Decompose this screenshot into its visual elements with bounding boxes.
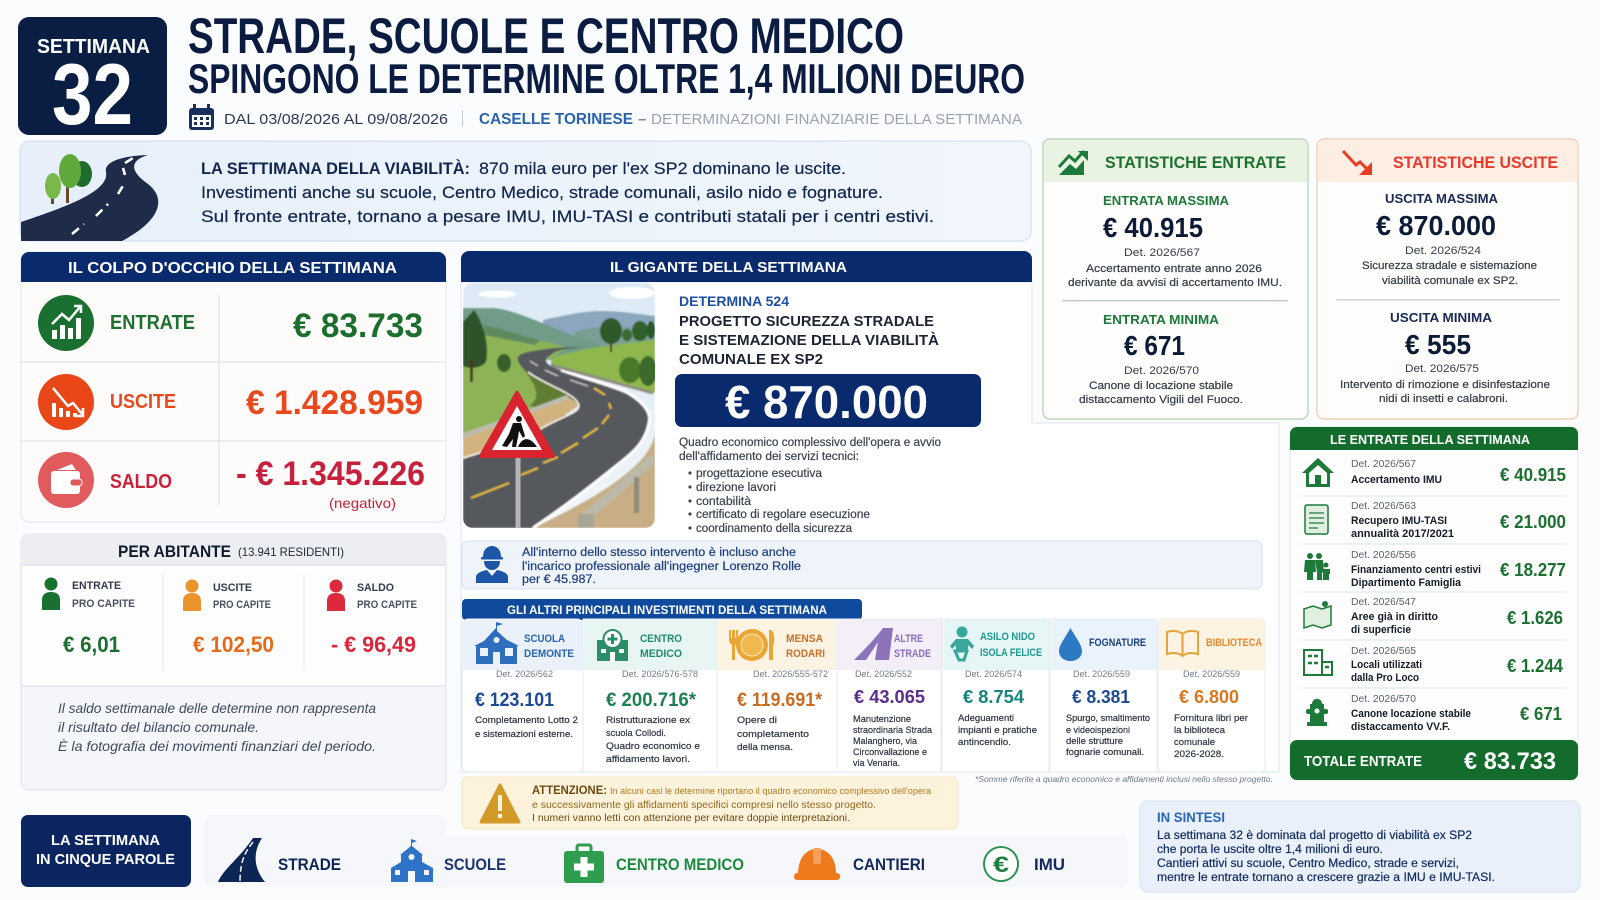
row: saldo: - € 1.345.226 [236,455,425,493]
row: locali pro loco: Locali utilizzati [1351,659,1422,671]
card: scuola demonte: Det. 2026/562 [496,669,553,679]
word: cantieri: CANTIERI [853,855,925,874]
row: centri estivi: € 18.277 [1500,560,1566,580]
entrata massima: Det. 2026/567 [1124,247,1200,259]
uscita minima [1340,310,1550,405]
row: uscite [38,374,423,430]
date and place line: CASELLE TORINESE [479,111,633,128]
row: canone VV.F.: € 671 [1520,704,1562,724]
callout: attenzione: In alcuni casi le determine riportano il quadro economico complessivo dell'opera [610,786,932,797]
card: altre strade: ALTRE [894,633,923,645]
icon: winding road with trees [21,154,158,241]
card: fognature: delle strutture [1066,736,1123,746]
title: STRADE, SCUOLE E CENTRO MEDICO [188,8,904,64]
row: accertamento IMU: € 40.915 [1500,465,1566,485]
determina text: COMUNALE EX SP2 [679,351,823,368]
entrata massima: Accertamento entrate anno 2026 [1086,263,1262,275]
uscite pro capite: € 102,50 [193,632,274,657]
word: IMU [984,847,1065,881]
card: altre strade: via Venaria. [853,758,900,768]
panel: in sintesi [1140,801,1580,892]
saldo pro capite: SALDO [357,582,394,594]
description and bullets [679,437,941,535]
callout: attenzione: e successivamente gli affidamenti specifici compresi nello stesso progetto. [532,800,876,811]
row: aree diritto di superficie: di superficie [1351,624,1411,636]
entrata minima: Det. 2026/570 [1124,365,1199,377]
week badge: SETTIMANA [37,36,150,58]
description and bullets: certificato di regolare esecuzione [696,509,870,521]
row: saldo [38,452,425,511]
card: altre strade: Det. 2026/552 [855,669,912,679]
row: locali pro loco: dalla Pro Loco [1351,672,1419,684]
word: IMU: IMU [1034,855,1065,874]
determina text [679,293,939,368]
uscita massima: Det. 2026/524 [1405,245,1481,257]
panel: altri investimenti [462,599,1265,772]
row: locali pro loco [1304,646,1563,684]
callout: attenzione: ATTENZIONE: [532,783,607,797]
card: centro medico [583,619,717,772]
entrata massima: ENTRATA MASSIMA [1103,193,1230,208]
panel: altri investimenti: GLI ALTRI PRINCIPALI INVESTIMENTI DELLA SETTIMANA [507,603,827,617]
week badge: 32 [52,47,133,143]
row: canone VV.F.: Canone locazione stabile [1351,708,1471,720]
row: centri estivi [1304,550,1566,589]
entrata massima: derivante da avvisi di accertamento IMU. [1068,277,1282,289]
entrata minima: ENTRATA MINIMA [1103,312,1220,327]
word: IMU: € [993,852,1009,877]
panel: in sintesi: IN SINTESI [1157,809,1225,825]
card: mensa rodari: MENSA [786,633,823,645]
card: scuola demonte: SCUOLA [524,633,565,645]
card: asilo nido: Det. 2026/574 [965,669,1022,679]
card: altre strade: Manutenzione [853,714,911,724]
card: altre strade: STRADE [894,648,931,660]
entrate pro capite: ENTRATE [72,580,121,592]
row: locali pro loco: Det. 2026/565 [1351,646,1416,657]
panel: cinque parole [204,815,1128,887]
banner text: Investimenti anche su scuole, Centro Medico, strade comunali, asilo nido e fognature. [201,183,883,202]
row: aree diritto di superficie: € 1.626 [1507,608,1563,628]
card: fognature: fognarie comunali. [1066,747,1144,757]
uscita massima [1362,191,1537,287]
uscite pro capite: USCITE [213,582,252,594]
card: mensa rodari: Det. 2026/555-572 [753,669,828,679]
card: fognature: Spurgo, smaltimento [1066,713,1150,723]
row: entrate: € 83.733 [293,307,423,345]
word: centro medico: CENTRO MEDICO [616,855,744,874]
card: biblioteca: € 6.800 [1179,687,1239,707]
card: centro medico: Quadro economico e [606,741,700,752]
card: mensa rodari [717,619,837,772]
date and place line: – [638,111,646,128]
price box [675,374,981,428]
card: asilo nido: € 8.754 [963,687,1024,707]
card: scuola demonte [462,619,583,772]
card: asilo nido [942,619,1049,772]
card: fognature [1050,619,1157,772]
card: scuola demonte: € 123.101 [475,690,554,711]
description and bullets: dell'affidamento dei servizi tecnici: [679,451,859,463]
total row [1290,740,1578,780]
card: centro medico: scuola Collodi. [606,728,666,739]
note: il risultato del bilancio comunale. [58,719,259,735]
card: mensa rodari: della mensa. [737,742,793,753]
panel: il gigante della settimana [461,251,1279,772]
callout: engineer: l'incarico professionale all'ingegner Lorenzo Rolle [522,561,801,573]
description and bullets: Quadro economico complessivo dell'opera e avvio [679,437,941,449]
row: centri estivi: Dipartimento Famiglia [1351,577,1462,589]
card: mensa rodari: RODARI [786,648,825,660]
card: altre strade [837,619,941,772]
callout: attenzione [462,777,958,829]
card: altre strade: € 43.065 [854,687,925,707]
entrata minima: € 671 [1124,330,1185,361]
panel: in sintesi: Cantieri attivi su scuole, Centro Medico, strade e servizi, [1157,858,1459,870]
panel: il colpo d'occhio [21,252,446,522]
row: centri estivi: Det. 2026/556 [1351,550,1416,561]
card: biblioteca: 2026-2028. [1174,749,1224,760]
banner text: 870 mila euro per l'ex SP2 dominano le uscite. [479,159,846,178]
card: scuola demonte: e sistemazioni esterne. [475,729,573,740]
row: canone VV.F.: distaccamento VV.F. [1351,721,1450,733]
card: mensa rodari: € 119.691* [737,690,823,711]
label: la settimana in cinque parole: IN CINQUE PAROLE [36,851,175,868]
banner text [201,159,934,226]
uscita massima: USCITA MASSIMA [1385,191,1499,206]
row: recupero IMU-TASI: Recupero IMU-TASI [1351,515,1447,527]
panel: le entrate della settimana [1290,427,1578,780]
uscite pro capite: PRO CAPITE [213,599,271,611]
panel: per abitante: PER ABITANTE [118,542,231,561]
date and place line [189,104,1022,130]
uscita massima: € 870.000 [1376,210,1496,241]
row: canone VV.F. [1306,694,1562,733]
card: scuola demonte: Completamento Lotto 2 [475,715,578,726]
word: cantieri [794,848,925,880]
icon: warning triangle [481,785,519,822]
card: biblioteca: comunale [1174,737,1215,748]
entrata minima: distaccamento Vigili del Fuoco. [1079,394,1243,406]
row: uscite: € 1.428.959 [246,384,423,422]
card: centro medico: MEDICO [640,648,682,660]
uscita minima: nidi di insetti e calabroni. [1379,393,1508,405]
label: la settimana in cinque parole [21,815,191,887]
panel: per abitante: (13.941 RESIDENTI) [238,545,344,559]
icon: calendar [189,104,214,130]
card: centro medico: Ristrutturazione ex [606,715,690,726]
description and bullets: direzione lavori [696,482,776,494]
entrata minima: Canone di locazione stabile [1089,380,1233,392]
row: saldo: (negativo) [329,495,396,511]
card: fognature: Det. 2026/559 [1073,669,1130,679]
card: fognature: € 8.381 [1072,687,1130,707]
panel: il gigante della settimana: IL GIGANTE DELLA SETTIMANA [610,259,847,276]
note: È la fotografia dei movimenti finanziari del periodo. [58,738,376,754]
title: SPINGONO LE DETERMINE OLTRE 1,4 MILIONI DEURO [188,55,1025,102]
date and place line: DAL 03/08/2026 AL 09/08/2026 [224,111,448,128]
row: aree diritto di superficie: Det. 2026/547 [1351,597,1416,608]
uscite pro capite [183,580,274,657]
label: la settimana in cinque parole: LA SETTIMANA [51,832,160,849]
uscita minima: USCITA MINIMA [1390,310,1493,325]
total row: TOTALE ENTRATE [1304,753,1422,770]
card: fognature: e videoispezioni [1066,725,1130,735]
callout: attenzione: I numeri vanno letti con attenzione per evitare doppie interpretazioni. [532,813,850,824]
card: altre strade: Circonvallazione e [853,747,927,757]
word: strade [218,838,341,882]
panel: per abitante [21,534,446,790]
entrata minima [1079,312,1243,406]
footnote: *Somme riferite a quadro economico e affidamenti inclusi nello stesso progetto. [975,774,1273,784]
callout: engineer [462,541,1262,589]
card: asilo nido: antincendio. [958,737,1011,748]
card: asilo nido: ISOLA FELICE [980,647,1042,659]
entrate pro capite [42,578,135,657]
word: strade: STRADE [278,855,341,874]
card: mensa rodari: completamento [737,729,809,740]
card: asilo nido: ASILO NIDO [980,631,1035,643]
panel: le entrate della settimana: LE ENTRATE DELLA SETTIMANA [1330,432,1531,447]
banner text: Sul fronte entrate, tornano a pesare IMU, IMU-TASI e contributi statali per i centri estivi. [201,207,934,226]
entrata massima: € 40.915 [1103,212,1203,243]
word: scuole [391,839,506,882]
card: biblioteca: BIBLIOTECA [1206,637,1262,649]
week badge [18,17,167,143]
row: recupero IMU-TASI: annualità 2017/2021 [1351,528,1454,540]
photo: road with works sign [463,280,657,528]
card: centro medico: CENTRO [640,633,682,645]
note: Il saldo settimanale delle determine non rappresenta [58,700,376,716]
word: centro medico [564,845,744,883]
row: recupero IMU-TASI: € 21.000 [1500,512,1566,532]
row: accertamento IMU: Det. 2026/567 [1351,459,1416,470]
panel: statistiche entrate [1043,139,1308,419]
callout: engineer: All'interno dello stesso intervento è incluso anche [522,547,796,559]
card: biblioteca: Det. 2026/559 [1183,669,1240,679]
icon: falling arrow [1343,151,1372,175]
card: asilo nido: Adeguamenti [958,713,1014,724]
total row: € 83.733 [1464,748,1556,775]
note [58,700,376,754]
panel: il colpo d'occhio: IL COLPO D'OCCHIO DELLA SETTIMANA [68,260,397,277]
description and bullets: coordinamento della sicurezza [696,523,853,535]
description and bullets: contabilità [696,496,752,508]
card: altre strade: straordinaria Strada [853,725,932,735]
description and bullets: progettazione esecutiva [696,468,823,480]
row: recupero IMU-TASI: Det. 2026/563 [1351,501,1416,512]
card: asilo nido: impianti e pratiche [958,725,1037,736]
card: scuola demonte: DEMONTE [524,648,574,660]
determina text: E SISTEMAZIONE DELLA VIABILITÀ [679,332,939,349]
row: entrate: ENTRATE [110,312,195,334]
uscita minima: € 555 [1405,329,1471,360]
card: biblioteca: Fornitura libri per [1174,713,1248,724]
row: entrate [38,295,423,351]
card: fognature: FOGNATURE [1089,637,1146,649]
determina text: PROGETTO SICUREZZA STRADALE [679,313,934,330]
card: biblioteca: la biblioteca [1174,725,1226,736]
determina text: DETERMINA 524 [679,293,789,309]
uscita massima: viabilità comunale ex SP2. [1382,275,1518,287]
price box: € 870.000 [725,376,928,428]
uscita massima: Sicurezza stradale e sistemazione [1362,260,1537,272]
saldo pro capite: PRO CAPITE [357,599,417,611]
entrate pro capite: € 6,01 [63,632,120,657]
card: mensa rodari: Opere di [737,715,777,726]
banner: la settimana della viabilità [20,141,1031,241]
entrate pro capite: PRO CAPITE [72,598,135,610]
saldo pro capite: - € 96,49 [331,632,416,657]
panel: in sintesi: La settimana 32 è dominata dal progetto di viabilità ex SP2 [1157,830,1472,842]
card: centro medico: affidamento lavori. [606,754,690,765]
uscita minima: Det. 2026/575 [1405,363,1479,375]
row: saldo: SALDO [110,471,172,493]
row: accertamento IMU: Accertamento IMU [1351,474,1442,486]
icon: rising chart [1059,151,1088,175]
uscita minima: Intervento di rimozione e disinfestazione [1340,379,1550,391]
banner text: LA SETTIMANA DELLA VIABILITÀ: [201,159,470,178]
entrata massima [1068,193,1282,289]
panel: statistiche uscite: STATISTICHE USCITE [1393,153,1558,172]
row: canone VV.F.: Det. 2026/570 [1351,694,1416,705]
title [188,8,1025,102]
panel: in sintesi: che porta le uscite oltre 1,4 milioni di euro. [1157,844,1383,856]
callout: engineer: per € 45.987. [522,574,596,586]
card: biblioteca [1158,619,1265,772]
card: centro medico: € 200.716* [606,690,697,711]
row: aree diritto di superficie [1304,597,1563,636]
panel: in sintesi: mentre le entrate tornano a crescere grazie a IMU e IMU-TASI. [1157,872,1495,884]
row: accertamento IMU [1302,458,1566,487]
row: centri estivi: Finanziamento centri estivi [1351,564,1481,576]
row: recupero IMU-TASI [1305,501,1566,540]
panel: statistiche uscite [1317,139,1578,419]
saldo pro capite [327,580,417,657]
card: altre strade: Malanghero, via [853,736,917,746]
date and place line: DETERMINAZIONI FINANZIARIE DELLA SETTIMANA [651,111,1022,128]
icon: worker [476,546,508,583]
row: uscite: USCITE [110,391,176,413]
panel: statistiche entrate: STATISTICHE ENTRATE [1105,153,1286,172]
row: aree diritto di superficie: Aree già in diritto [1351,611,1438,623]
row: locali pro loco: € 1.244 [1507,656,1563,676]
word: scuole: SCUOLE [444,855,506,874]
card: centro medico: Det. 2026/576-578 [622,669,698,679]
